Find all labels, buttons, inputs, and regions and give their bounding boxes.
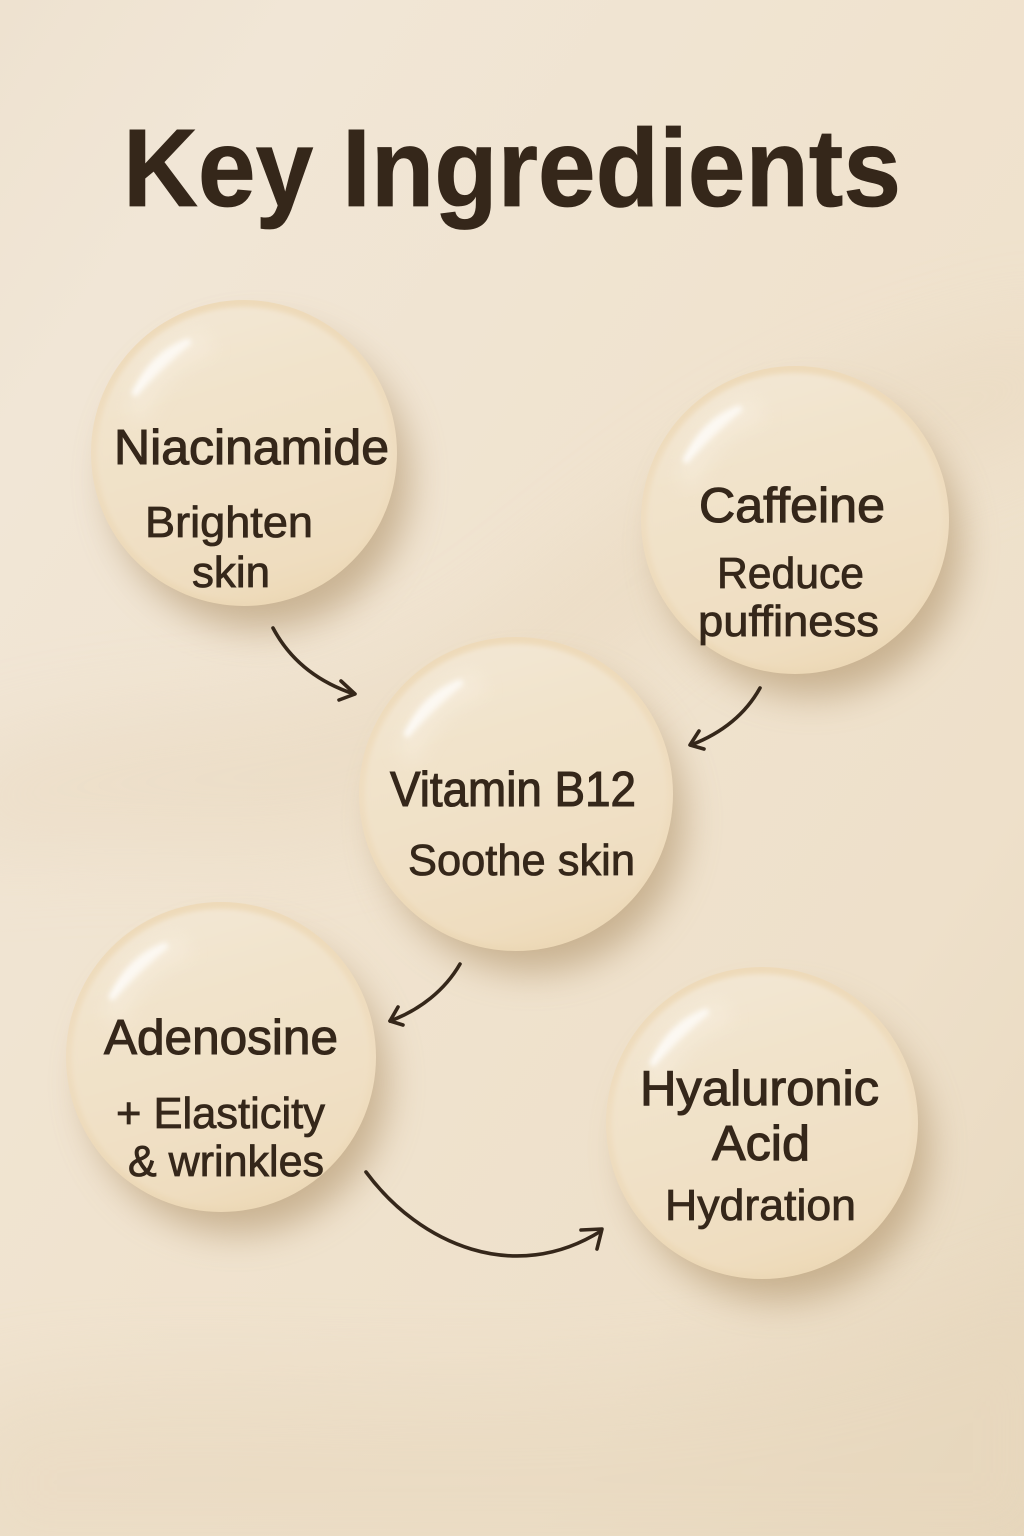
disc: [606, 967, 929, 1300]
panel: Adenosine: [66, 902, 387, 1233]
panel: Hyaluronic Acid: [606, 967, 929, 1300]
arrow: Vitamin B12 to Adenosine: [390, 964, 460, 1025]
benefit: Hydration: [665, 1181, 856, 1230]
disc: [66, 902, 387, 1233]
benefit: [116, 1089, 325, 1186]
heading: Hyaluronic: [640, 1062, 879, 1116]
benefit: puffiness: [698, 597, 879, 646]
benefit: Reduce: [717, 549, 864, 598]
heading: Acid: [712, 1117, 810, 1171]
disc: [641, 366, 961, 696]
benefit: [698, 549, 879, 646]
arrow: Adenosine to Hyaluronic Acid: [366, 1172, 602, 1256]
benefit: [145, 498, 313, 597]
heading: Caffeine: [699, 479, 885, 533]
benefit: skin: [192, 548, 270, 597]
panel: Niacinamide: [91, 300, 410, 629]
disc: [359, 637, 684, 972]
heading: [640, 1062, 879, 1171]
benefit: + Elasticity: [116, 1089, 325, 1138]
disc: [91, 300, 410, 629]
heading: Adenosine: [104, 1011, 338, 1065]
arrow: Caffeine to Vitamin B12: [690, 688, 760, 749]
arrow: Niacinamide to Vitamin B12: [273, 628, 355, 700]
heading: Niacinamide: [114, 421, 389, 475]
title: Key Ingredients: [123, 107, 901, 230]
benefit: Soothe skin: [408, 836, 635, 885]
panel: Caffeine: [641, 366, 961, 696]
heading: Vitamin B12: [390, 763, 636, 817]
panel: Vitamin B12: [359, 637, 684, 972]
benefit: Brighten: [145, 498, 313, 547]
benefit: & wrinkles: [128, 1137, 324, 1186]
